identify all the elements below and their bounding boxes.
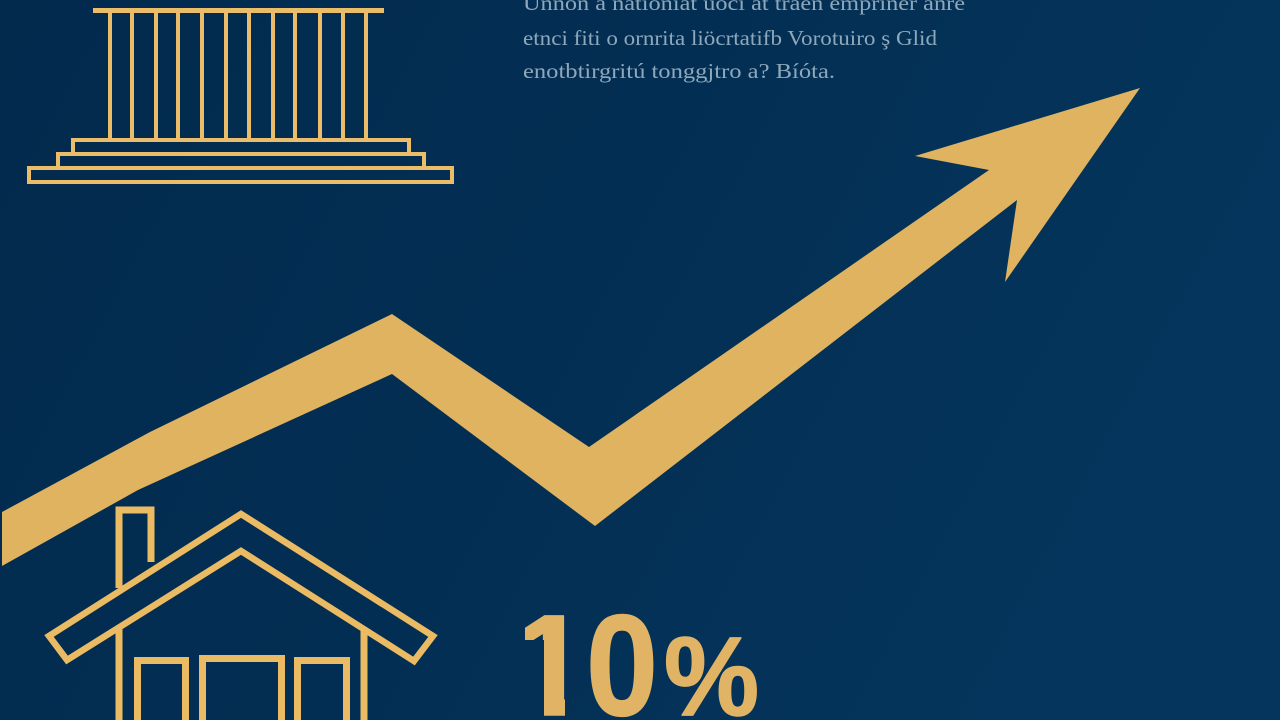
building columns xyxy=(110,12,366,138)
arrow: rising zigzag trend xyxy=(2,88,1140,566)
house left window xyxy=(138,660,186,720)
house right window xyxy=(298,660,346,720)
building roof bar xyxy=(93,8,384,13)
text block: description: enotbtirgritú tonggjtro a? Bíóta. xyxy=(523,59,835,83)
stat: 10 percent xyxy=(525,614,757,718)
text block: description xyxy=(523,0,965,83)
icon: classical building with columns xyxy=(29,10,452,182)
text block: description: etnci fiti o ornrita liöcrtatifb Vorotuiro ş Glid xyxy=(523,26,938,50)
house door xyxy=(202,658,282,720)
building steps xyxy=(29,140,452,182)
icon: house xyxy=(49,510,433,720)
house chimney xyxy=(119,510,151,588)
house roof xyxy=(49,514,433,661)
house walls xyxy=(119,628,364,720)
